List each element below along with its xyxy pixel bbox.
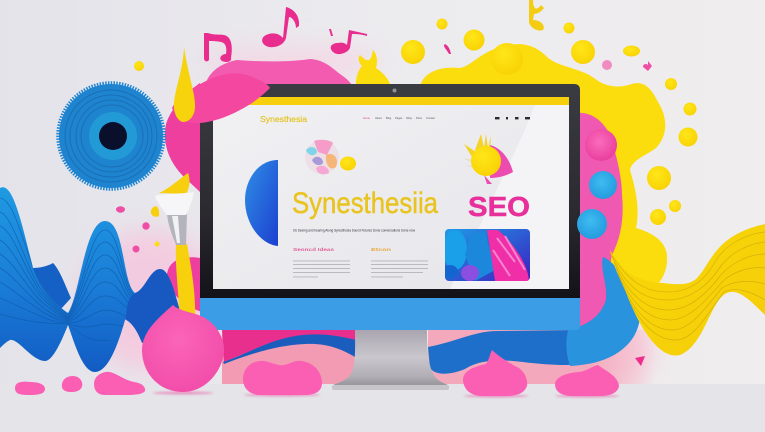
yellow header bar — [213, 97, 569, 105]
ribbon contour lines — [610, 232, 765, 340]
yellow duck blob — [356, 50, 390, 84]
website navigation: Home — [363, 116, 370, 120]
monitor stand — [333, 330, 448, 385]
blue round sponge disc — [58, 83, 164, 189]
lower pale pink backdrop right — [428, 330, 655, 384]
pink splash droplets — [116, 44, 652, 366]
music note: yellow — [529, 0, 544, 31]
monitor chin — [200, 296, 580, 330]
monitor base — [332, 385, 449, 390]
music note: large — [262, 7, 299, 47]
website navigation: Blog — [386, 116, 392, 120]
website navigation — [363, 116, 435, 120]
wave right dark lobe — [120, 269, 180, 343]
lower pink backdrop — [222, 329, 360, 384]
abstract coloured image — [442, 229, 530, 281]
right monitor clay balls — [577, 129, 617, 239]
foreground pink clay blobs — [15, 350, 619, 396]
header icons — [495, 117, 530, 119]
icon: yellow sun with petals — [462, 134, 513, 184]
yellow droplets — [134, 18, 698, 246]
pink glow behind artwork — [80, 46, 655, 380]
icon: multicolour ball — [305, 140, 356, 174]
blue sound wave — [0, 187, 180, 372]
monitor bezel — [200, 84, 580, 298]
yellow splash blob — [420, 44, 667, 300]
tagline: Os Seeing and hearing Along Synesthesia Sound Futures Done conversations Done now — [293, 228, 416, 232]
left pink clay — [165, 83, 205, 312]
yellow ball on splash — [491, 43, 523, 75]
small pink-yellow droplet — [602, 60, 612, 70]
website navigation: Price — [416, 116, 422, 120]
pink clay above monitor — [205, 59, 351, 92]
main title: Synesthesiia — [292, 187, 438, 220]
floor — [0, 384, 765, 432]
brush paint dab — [151, 173, 189, 217]
right yellow ribbon wave — [610, 224, 765, 356]
website navigation: About — [375, 116, 382, 120]
brush ferrule — [167, 213, 187, 245]
SEO heading: SEO — [468, 191, 530, 222]
paint brush — [151, 173, 195, 318]
music note: beamed — [204, 33, 232, 62]
wave contour lines — [0, 198, 135, 340]
monitor — [200, 84, 580, 390]
brush bristles — [155, 192, 194, 215]
large pink sponge ball — [142, 305, 224, 392]
left section heading: Seoncd Ideas — [293, 247, 335, 252]
right blue swoosh — [428, 257, 640, 374]
icon: blue half circle — [245, 160, 278, 246]
light reflection — [450, 105, 569, 289]
right section body — [371, 260, 428, 277]
wave back lobe — [33, 263, 71, 310]
music note: flagged — [329, 29, 367, 54]
website header logo: Synesthesia — [260, 114, 307, 124]
left section body — [293, 260, 350, 277]
website navigation: Contact — [426, 116, 435, 120]
website navigation: Pages — [395, 116, 403, 120]
floor contact shadows — [153, 392, 619, 398]
right pink clay — [578, 113, 623, 328]
ferrule highlight — [172, 216, 180, 243]
pink clay flap over monitor corner — [172, 73, 270, 123]
left blue swoosh — [223, 334, 356, 364]
brush handle — [176, 244, 195, 318]
right section heading: Etcon — [371, 247, 391, 252]
yellow teardrop — [174, 47, 195, 122]
wave front ribbon — [0, 187, 135, 372]
screen panel — [213, 97, 569, 289]
website navigation: Shop — [406, 116, 413, 120]
webcam — [392, 88, 396, 92]
